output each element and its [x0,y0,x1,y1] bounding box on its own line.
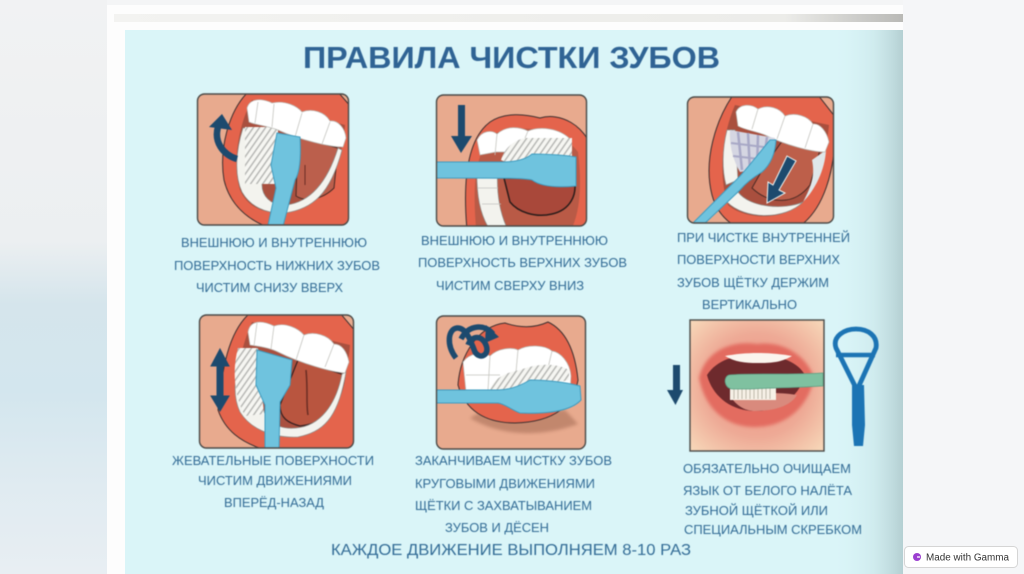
caption: panel 2 [418,234,627,293]
caption: panel 2: ВНЕШНЮЮ И ВНУТРЕННЮЮ [421,234,608,248]
caption: panel 1 [174,236,380,295]
title: ПРАВИЛА ЧИСТКИ ЗУБОВ [303,40,720,75]
caption: panel 6: ЗУБНОЙ ЩЁТКОЙ ИЛИ [685,503,828,518]
icon: tongue scraper [835,329,876,446]
caption: panel 3: ЗУБОВ ЩЁТКУ ДЕРЖИМ [677,276,829,290]
caption: panel 4: ЧИСТИМ ДВИЖЕНИЯМИ [198,474,352,488]
caption: panel 6: ЯЗЫК ОТ БЕЛОГО НАЛЁТА [683,484,853,498]
caption: panel 1: ПОВЕРХНОСТЬ НИЖНИХ ЗУБОВ [174,259,380,273]
caption: panel 4 [172,454,374,510]
caption: panel 5: КРУГОВЫМИ ДВИЖЕНИЯМИ [415,477,595,491]
caption: panel 1: ВНЕШНЮЮ И ВНУТРЕННЮЮ [181,236,367,250]
panel: upper teeth outer and inner surface [436,95,592,230]
caption: panel 3: ВЕРТИКАЛЬНО [702,298,797,312]
caption: panel 3 [677,230,850,312]
badge: made with gamma [904,546,1018,568]
caption: panel 5: ЗУБОВ И ДЁСЕН [445,521,549,535]
panel: lower teeth outer and inner surface [197,92,352,230]
icon: down arrow beside photo [667,365,683,405]
panel: tongue cleaning photo [690,320,824,451]
caption: panel 6 [683,462,862,537]
badge: made with gamma: Made with Gamma [926,552,1009,564]
icon: gamma logo [913,553,921,561]
panel: chewing surfaces [199,313,356,450]
caption: panel 2: ПОВЕРХНОСТЬ ВЕРХНИХ ЗУБОВ [418,256,627,270]
caption: panel 3: ПРИ ЧИСТКЕ ВНУТРЕННЕЙ [677,230,850,245]
panel: circular movements [436,316,586,449]
caption: panel 5 [415,454,612,535]
caption: panel 5: ЗАКАНЧИВАЕМ ЧИСТКУ ЗУБОВ [415,454,612,468]
caption: panel 4: ВПЕРЁД-НАЗАД [224,496,325,510]
caption: panel 3: ПОВЕРХНОСТИ ВЕРХНИХ [677,253,841,267]
poster sheet [107,5,903,574]
panel: inner surface, brush vertical [687,95,836,226]
caption: panel 5: ЩЁТКИ С ЗАХВАТЫВАНИЕМ [415,499,592,513]
caption: panel 1: ЧИСТИМ СНИЗУ ВВЕРХ [196,281,344,295]
footer note: КАЖДОЕ ДВИЖЕНИЕ ВЫПОЛНЯЕМ 8-10 РАЗ [331,542,691,559]
caption: panel 4: ЖЕВАТЕЛЬНЫЕ ПОВЕРХНОСТИ [172,454,374,468]
caption: panel 6: ОБЯЗАТЕЛЬНО ОЧИЩАЕМ [683,462,851,476]
caption: panel 6: СПЕЦИАЛЬНЫМ СКРЕБКОМ [684,523,862,537]
caption: panel 2: ЧИСТИМ СВЕРХУ ВНИЗ [436,279,584,293]
